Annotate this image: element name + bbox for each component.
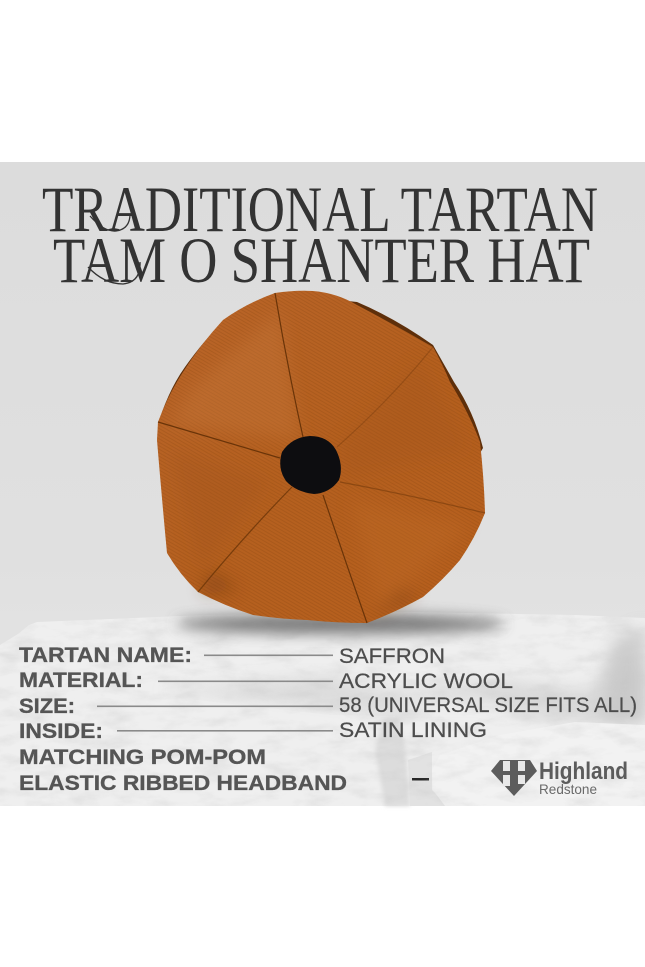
spec list	[19, 643, 637, 795]
spec: tartan name: SAFFRON	[339, 644, 445, 668]
pom-pom	[280, 436, 341, 494]
panel shading	[170, 310, 470, 618]
logo: Highland Redstone	[491, 758, 628, 797]
spec: inside: INSIDE:	[19, 719, 103, 743]
grey backdrop panel	[0, 162, 645, 806]
feature: elastic headband: ELASTIC RIBBED HEADBAND	[19, 771, 347, 795]
wordmark: Highland	[539, 758, 628, 785]
feature: matching pom-pom: MATCHING POM-POM	[19, 745, 266, 769]
hat	[157, 291, 485, 623]
spec: size	[19, 693, 637, 718]
spec: material	[19, 668, 513, 693]
hat back rim	[162, 293, 483, 470]
hat shadow	[175, 614, 505, 634]
title	[42, 174, 598, 297]
spec: inside: SATIN LINING	[339, 718, 487, 742]
hat crown	[157, 291, 485, 623]
spec: inside	[19, 718, 487, 743]
spec: tartan name: TARTAN NAME:	[19, 643, 192, 667]
sub wordmark: Redstone	[539, 781, 597, 797]
spec: material: MATERIAL:	[19, 668, 143, 692]
spec: tartan name	[19, 643, 445, 668]
fabric twill	[157, 291, 485, 623]
stone plinth	[0, 612, 645, 806]
spec: size: 58 (UNIVERSAL SIZE FITS ALL)	[339, 693, 637, 717]
spec: size: SIZE:	[19, 694, 75, 718]
icon: diamond monogram	[491, 760, 537, 796]
spec: material: ACRYLIC WOOL	[339, 669, 513, 693]
seams	[158, 293, 485, 623]
